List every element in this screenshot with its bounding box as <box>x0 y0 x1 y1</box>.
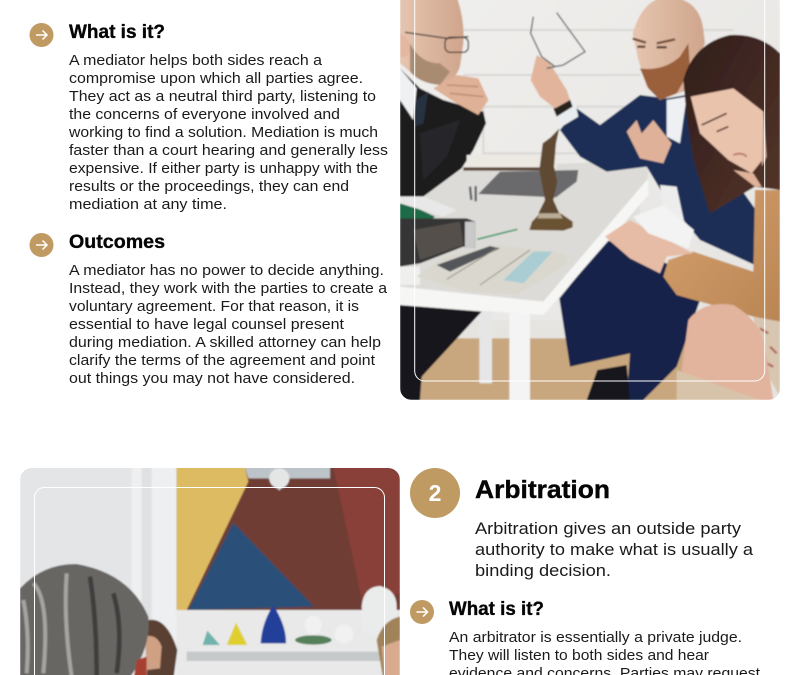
photo frame: white outline <box>34 488 384 675</box>
text block: mediation description: results or the proceedings, they can end <box>69 178 349 195</box>
text block: mediation description: They act as a neutral third party, listening to <box>69 88 376 105</box>
text block: arbitration intro <box>475 519 754 580</box>
text block: arbitration description <box>449 629 761 675</box>
icon: arrow bullet, outcomes <box>30 233 54 257</box>
text block: mediation outcomes <box>69 262 388 387</box>
text block: mediation outcomes: A mediator has no power to decide anything. <box>69 262 384 279</box>
icon: number 2 badge <box>410 468 460 518</box>
icon: arrow bullet, arbitration <box>410 600 434 624</box>
text block: arbitration intro: binding decision. <box>475 561 611 580</box>
photo: arbitration room <box>20 467 400 675</box>
photo frame: white outline <box>415 0 765 381</box>
text block: mediation description <box>68 52 388 213</box>
heading: outcomes: Outcomes <box>69 232 165 253</box>
text block: mediation description: compromise upon which all parties agree. <box>69 70 363 87</box>
heading: what is it, arbitration: What is it? <box>449 599 544 620</box>
text block: mediation outcomes: during mediation. A skilled attorney can help <box>69 334 381 351</box>
text block: arbitration description: They will listen to both sides and hear <box>449 647 709 664</box>
text block: mediation description: the concerns of everyone involved and <box>69 106 340 123</box>
text block: mediation outcomes: essential to have legal counsel present <box>69 316 345 333</box>
text block: mediation outcomes: Instead, they work with the parties to create a <box>69 280 388 297</box>
text block: mediation outcomes: voluntary agreement. For that reason, it is <box>69 298 359 315</box>
text block: mediation description: mediation at any time. <box>69 196 227 213</box>
text block: mediation description: faster than a court hearing and generally less <box>69 142 388 159</box>
text block: mediation outcomes: out things you may not have considered. <box>69 370 355 387</box>
heading: what is it: What is it? <box>69 22 165 43</box>
center man head <box>633 0 705 100</box>
text block: mediation description: expensive. If either party is unhappy with the <box>69 160 378 177</box>
text block: arbitration intro: Arbitration gives an outside party <box>475 519 742 538</box>
icon: arrow bullet, what is it <box>30 23 54 47</box>
icon: number 2 badge: 2 <box>429 480 441 506</box>
text block: mediation description: A mediator helps both sides reach a <box>69 52 323 69</box>
text block: mediation description: working to find a solution. Mediation is much <box>68 124 378 141</box>
text block: mediation outcomes: clarify the terms of the agreement and point <box>69 352 376 369</box>
text block: arbitration intro: authority to make what is usually a <box>475 540 754 559</box>
heading: arbitration: Arbitration <box>475 476 610 504</box>
photo: mediation meeting <box>400 0 780 403</box>
woman <box>663 190 780 322</box>
text block: arbitration description: An arbitrator is essentially a private judge. <box>449 629 742 646</box>
